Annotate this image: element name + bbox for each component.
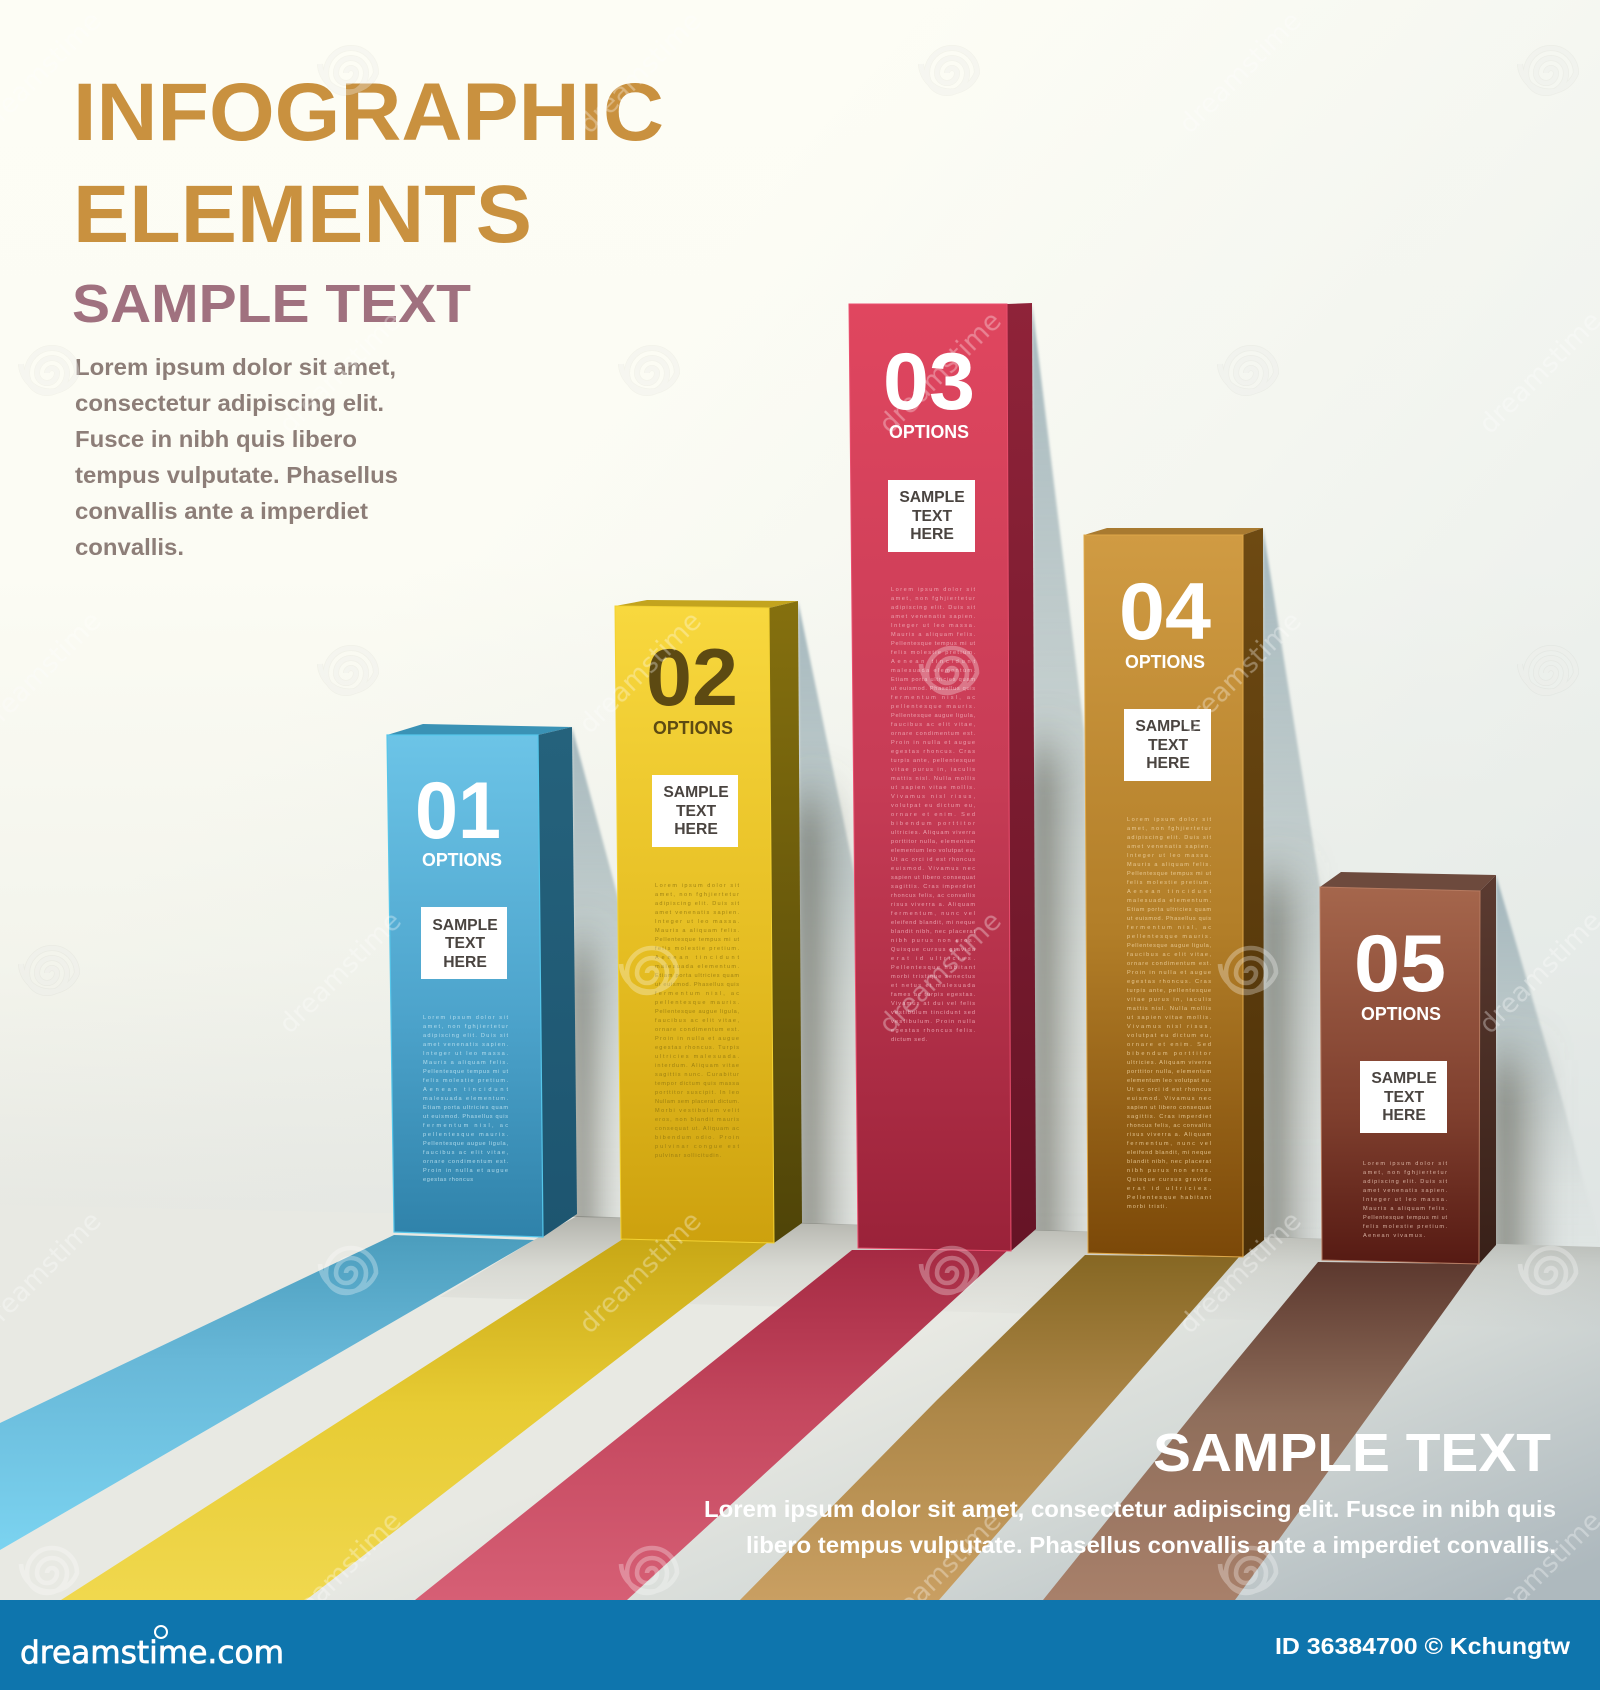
small text 01: malesuada elementum.	[423, 1096, 508, 1102]
small text 02: malesuada elementum.	[655, 964, 739, 970]
small text 03: Etiam porta ultricies quam	[891, 677, 975, 683]
intro paragraph: Fusce in nibh quis libero	[75, 426, 357, 452]
small text 03: volutpat eu dictum eu,	[891, 803, 975, 809]
small text 04: malesuada elementum.	[1127, 898, 1211, 904]
small text 03: Vivamus nisl risus,	[891, 794, 975, 800]
small text 01: faucibus ac elit vitae,	[423, 1150, 508, 1156]
small text 02: ornare condimentum est.	[655, 1027, 739, 1033]
small text 03: eleifend blandit, mi neque	[891, 920, 975, 926]
options label 04: OPTIONS	[1125, 652, 1205, 672]
label box 03: TEXT	[912, 508, 952, 525]
small text 05: Aenean vivamus.	[1363, 1233, 1425, 1239]
intro paragraph: convallis ante a imperdiet	[75, 498, 368, 524]
bottom heading: SAMPLE TEXT	[1153, 1423, 1551, 1483]
small text 04: elementum leo volutpat eu.	[1127, 1078, 1211, 1084]
options label 02: OPTIONS	[653, 718, 733, 738]
small text 02: pulvinar congue est	[655, 1144, 739, 1150]
small text 03: vitae purus in, iaculis	[891, 767, 975, 773]
small text 03: euismod. Vivamus nec	[891, 866, 975, 872]
small text 03: adipiscing elit. Duis sit	[891, 605, 975, 611]
small text 04: bibendum porttitor	[1127, 1051, 1211, 1057]
small text 01: egestas rhoncus	[423, 1177, 473, 1183]
small text 03: egestas rhoncus felis.	[891, 1028, 975, 1034]
small text 02: Aenean tincidunt	[655, 955, 739, 961]
floor stripes	[0, 1235, 1478, 1600]
small text 03: amet, non fghjiertetur	[891, 596, 975, 602]
small text 02: Integer ut leo massa.	[655, 919, 739, 925]
small text 02: porttitor suscipit. In leo	[655, 1090, 739, 1096]
label box 05: SAMPLE	[1371, 1070, 1437, 1087]
small text 04: fermentum nisl, ac	[1127, 925, 1211, 931]
bar 01 right face	[538, 727, 577, 1237]
small text 03: ut euismod. Phasellus quis	[891, 686, 975, 692]
small text 04: Etiam porta ultricies quam	[1127, 907, 1211, 913]
watermark text: dreamstime	[573, 1205, 708, 1340]
options label 01: OPTIONS	[422, 850, 502, 870]
small text 03: faucibus ac elit vitae,	[891, 722, 975, 728]
small text 01: ornare condimentum est.	[423, 1159, 508, 1165]
small text 05: felis molestie pretium.	[1363, 1224, 1447, 1230]
watermark text: dreamstime	[573, 605, 708, 740]
small text 02: fermentum nisl, ac	[655, 991, 739, 997]
label box 02	[652, 775, 738, 847]
small text 03: fermentum, nunc vel	[891, 911, 975, 917]
floor	[0, 1205, 1600, 1600]
stripe: brown	[1043, 1262, 1478, 1600]
small text 01: felis molestie pretium.	[423, 1078, 508, 1084]
small text 03: ultricies. Aliquam viverra	[891, 830, 976, 836]
bar 03 front face	[849, 304, 1011, 1251]
small text 05: amet, non fghjiertetur	[1363, 1170, 1447, 1176]
number 05: 05	[1354, 919, 1446, 1009]
small text 04: Proin in nulla et augue	[1127, 970, 1211, 976]
small text 02: Mauris a aliquam felis.	[655, 928, 739, 934]
small text 02: pellentesque mauris.	[655, 1000, 739, 1006]
watermark text: dreamstime	[873, 905, 1008, 1040]
small text 03: Mauris a aliquam felis.	[891, 632, 975, 638]
small text 03: vestibulum. Proin nulla	[891, 1019, 976, 1025]
small text 02: tempor dictum quis massa	[655, 1081, 740, 1087]
small text 01: adipiscing elit. Duis sit	[423, 1033, 508, 1039]
bar 01 front face	[387, 735, 543, 1237]
small text 04: Aenean tincidunt	[1127, 889, 1211, 895]
small text 02: amet, non fghjiertetur	[655, 892, 739, 898]
small text 04: Pellentesque augue ligula,	[1127, 943, 1211, 949]
bar 05 front face	[1320, 887, 1480, 1264]
number 04: 04	[1119, 567, 1211, 657]
label box 03: SAMPLE	[899, 489, 965, 506]
small text 04: volutpat eu dictum eu,	[1127, 1033, 1211, 1039]
watermark text: dreamstime	[573, 5, 708, 140]
bar 05	[1320, 872, 1496, 1264]
bar 03 right face	[1007, 303, 1036, 1251]
small text 05: Mauris a aliquam felis.	[1363, 1206, 1447, 1212]
small text 04: vitae purus in, iaculis	[1127, 997, 1211, 1003]
small text 05: Integer ut leo massa.	[1363, 1197, 1447, 1203]
small text 04: blandit nibh, nec placerat	[1127, 1159, 1211, 1165]
label box 01: SAMPLE	[432, 917, 498, 934]
small text 04: fermentum, nunc vel	[1127, 1141, 1211, 1147]
small text 01: pellentesque mauris.	[423, 1132, 508, 1138]
footer bar	[0, 1600, 1600, 1690]
small text 02: interdum. Aliquam vitae	[655, 1063, 739, 1069]
small text 03: vestibulum tincidunt sed	[891, 1010, 975, 1016]
small text 03: et netus et malesuada	[891, 983, 976, 989]
small text 03: erat id ultricies.	[891, 956, 975, 962]
small text 04: mattis nisl. Nulla mollis	[1127, 1006, 1211, 1012]
small text 04: nibh purus non eros.	[1127, 1168, 1211, 1174]
small text 04: egestas rhoncus. Cras	[1127, 979, 1211, 985]
small text 03: Proin in nulla et augue	[891, 740, 975, 746]
small text 05: adipiscing elit. Duis sit	[1363, 1179, 1447, 1185]
small text 04: adipiscing elit. Duis sit	[1127, 835, 1211, 841]
small text 04: ultricies. Aliquam viverra	[1127, 1060, 1212, 1066]
small text 03: fermentum nisl, ac	[891, 695, 975, 701]
small text 02: felis molestie pretium.	[655, 946, 739, 952]
label box 03: HERE	[910, 526, 954, 543]
small text 04: Quisque cursus gravida	[1127, 1177, 1212, 1183]
small text 04: ornare condimentum est.	[1127, 961, 1211, 967]
small text 03	[891, 587, 976, 1043]
small text 04: Integer ut leo massa.	[1127, 853, 1211, 859]
small text 04: Ut ac orci id est rhoncus	[1127, 1087, 1211, 1093]
small text 03: ornare et enim. Sed	[891, 812, 975, 818]
small text 03: malesuada elementum.	[891, 668, 975, 674]
label box 02: TEXT	[676, 803, 716, 820]
bar 04	[1084, 528, 1264, 1257]
small text 04: felis molestie pretium.	[1127, 880, 1211, 886]
small text 05: amet venenatis sapien.	[1363, 1188, 1447, 1194]
title	[73, 67, 664, 260]
small text 04: ut euismod. Phasellus quis	[1127, 916, 1211, 922]
stripe: yellow	[61, 1239, 767, 1600]
small text 02: Morbi vestibulum velit	[655, 1108, 739, 1114]
label box 03	[888, 480, 975, 552]
small text 01: Etiam porta ultricies quam	[423, 1105, 508, 1111]
bar 01	[387, 724, 577, 1237]
watermark text: dreamstime	[873, 305, 1008, 440]
watermark text: dreamstime	[1173, 605, 1308, 740]
small text 03: mattis nisl. Nulla mollis	[891, 776, 975, 782]
small text 02	[655, 883, 740, 1159]
small text 04: ornare et enim. Sed	[1127, 1042, 1211, 1048]
small text 04: morbi tristi.	[1127, 1204, 1167, 1210]
small text 01: amet venenatis sapien.	[423, 1042, 508, 1048]
small text 03: Aenean tincidunt	[891, 659, 975, 665]
small text 03: Quisque cursus gravida	[891, 947, 976, 953]
small text 01: amet, non fghjiertetur	[423, 1024, 508, 1030]
bar 02	[615, 600, 802, 1243]
small text 02: adipiscing elit. Duis sit	[655, 901, 739, 907]
label box 02: SAMPLE	[663, 784, 729, 801]
small text 04: eleifend blandit, mi neque	[1127, 1150, 1211, 1156]
small text 03: blandit nibh, nec placerat	[891, 929, 975, 935]
small text 02: Pellentesque augue ligula,	[655, 1009, 739, 1015]
bottom paragraph	[704, 1496, 1556, 1558]
bar 05 right face	[1479, 875, 1496, 1264]
watermark text: dreamstime	[273, 905, 408, 1040]
bar 05 top face	[1320, 872, 1496, 891]
small text 04: Mauris a aliquam felis.	[1127, 862, 1211, 868]
small text 02: faucibus ac elit vitae,	[655, 1018, 739, 1024]
small text 04: pellentesque mauris.	[1127, 934, 1211, 940]
intro paragraph	[75, 354, 398, 560]
small text 02: Etiam porta ultricies quam	[655, 973, 739, 979]
bar 04 top face	[1084, 528, 1263, 535]
watermark text: dreamstime	[1173, 5, 1308, 140]
small text 03: ut sapien vitae mollis.	[891, 785, 975, 791]
small text 01: Integer ut leo massa.	[423, 1051, 508, 1057]
small text 03: amet venenatis sapien.	[891, 614, 975, 620]
label box 02: HERE	[674, 821, 718, 838]
label box 04: HERE	[1146, 755, 1190, 772]
bottom paragraph: Lorem ipsum dolor sit amet, consectetur adipiscing elit. Fusce in nibh quis	[704, 1496, 1556, 1522]
small text 02: ultricies malesuada.	[655, 1054, 739, 1060]
bar 04 front face	[1084, 535, 1243, 1257]
footer credit: ID 36384700 © Kchungtw	[1275, 1633, 1570, 1659]
small text 03: rhoncus felis, ac convallis	[891, 893, 975, 899]
small text 02: Pellentesque tempus mi ut	[655, 937, 739, 943]
intro paragraph: consectetur adipiscing elit.	[75, 390, 384, 416]
small text 04: Pellentesque tempus mi ut	[1127, 871, 1211, 877]
small text 03: morbi tristique senectus	[891, 974, 975, 980]
small text 03: Pellentesque tempus mi ut	[891, 641, 975, 647]
small text 03: pellentesque mauris.	[891, 704, 975, 710]
small text 03: ornare condimentum est.	[891, 731, 975, 737]
label box 01: HERE	[443, 954, 487, 971]
label box 04: TEXT	[1148, 737, 1188, 754]
small text 03: elementum leo volutpat eu.	[891, 848, 975, 854]
small text 04: ut sapien vitae mollis.	[1127, 1015, 1211, 1021]
small text 02: amet venenatis sapien.	[655, 910, 739, 916]
stripe: tan	[740, 1255, 1239, 1600]
small text 03: nibh purus non eros.	[891, 938, 975, 944]
footer logo: dreamstime.com	[20, 1635, 284, 1671]
bar 01 top face	[387, 724, 572, 735]
small text 04: porttitor nulla, elementum	[1127, 1069, 1211, 1075]
intro paragraph: tempus vulputate. Phasellus	[75, 462, 398, 488]
small text 03: Ut ac orci id est rhoncus	[891, 857, 975, 863]
small text 01: Mauris a aliquam felis.	[423, 1060, 508, 1066]
small text 03: turpis ante, pellentesque	[891, 758, 975, 764]
small text 01: Lorem ipsum dolor sit	[423, 1015, 508, 1021]
number 02: 02	[646, 633, 738, 723]
small text 02: Nullam sem placerat dictum.	[655, 1099, 739, 1105]
small text 01: ut euismod. Phasellus quis	[423, 1114, 508, 1120]
small text 03: Integer ut leo massa.	[891, 623, 975, 629]
small text 04	[1127, 817, 1212, 1210]
small text 03: risus viverra a. Aliquam	[891, 902, 975, 908]
label box 05: TEXT	[1384, 1089, 1424, 1106]
small text 04: Vivamus nisl risus,	[1127, 1024, 1211, 1030]
small text 03: dictum sed.	[891, 1037, 927, 1043]
small text 03: Vivamus at dui vel felis	[891, 1001, 975, 1007]
bar 02 right face	[769, 601, 802, 1243]
stripe: blue	[0, 1235, 534, 1550]
intro paragraph: convallis.	[75, 534, 184, 560]
small text 05: Lorem ipsum dolor sit	[1363, 1161, 1447, 1167]
small text 01: Pellentesque augue ligula,	[423, 1141, 508, 1147]
bottom paragraph: libero tempus vulputate. Phasellus convallis ante a imperdiet convallis.	[746, 1532, 1556, 1558]
watermark text: dreamstime	[273, 305, 408, 440]
watermark text: dreamstime	[273, 1505, 408, 1640]
bar 03	[849, 303, 1036, 1251]
small text 01: fermentum nisl, ac	[423, 1123, 508, 1129]
small text 03: egestas rhoncus. Cras	[891, 749, 975, 755]
small text 02: eros, non blandit mauris	[655, 1117, 739, 1123]
label box 04: SAMPLE	[1135, 718, 1201, 735]
small text 04: turpis ante, pellentesque	[1127, 988, 1211, 994]
small text 02: ut euismod. Phasellus quis	[655, 982, 739, 988]
small text 02: Proin in nulla et augue	[655, 1036, 739, 1042]
small text 02: sagittis nunc. Curabitur	[655, 1072, 739, 1078]
options label 05: OPTIONS	[1361, 1004, 1441, 1024]
small text 02: egestas rhoncus. Turpis	[655, 1045, 739, 1051]
small text 04: erat id ultricies.	[1127, 1186, 1211, 1192]
small text 01: Proin in nulla et augue	[423, 1168, 508, 1174]
small text 03: porttitor nulla, elementum	[891, 839, 975, 845]
intro paragraph: Lorem ipsum dolor sit amet,	[75, 354, 396, 380]
label box 05	[1360, 1061, 1447, 1133]
bar 04 right face	[1243, 528, 1264, 1257]
small text 01: Pellentesque tempus mi ut	[423, 1069, 508, 1075]
small text 04: euismod. Vivamus nec	[1127, 1096, 1211, 1102]
subtitle: SAMPLE TEXT	[72, 274, 471, 334]
small text 04: Pellentesque habitant	[1127, 1195, 1211, 1201]
watermark text: dreamstime	[873, 1505, 1008, 1640]
label box 01	[421, 907, 507, 979]
small text 03: Pellentesque habitant	[891, 965, 975, 971]
small text 04: sapien ut libero consequat	[1127, 1105, 1211, 1111]
label box 01: TEXT	[445, 935, 485, 952]
small text 04: sagittis. Cras imperdiet	[1127, 1114, 1211, 1120]
small text 01	[423, 1015, 508, 1183]
watermark text: dreamstime	[1173, 1205, 1308, 1340]
small text 03: Lorem ipsum dolor sit	[891, 587, 975, 593]
small text 01: Aenean tincidunt	[423, 1087, 508, 1093]
small text 02: pulvinar sollicitudin.	[655, 1153, 721, 1159]
small text 03: bibendum porttitor	[891, 821, 975, 827]
label box 04	[1124, 709, 1211, 781]
small text 04: amet venenatis sapien.	[1127, 844, 1211, 850]
bar 02 top face	[615, 600, 798, 608]
small text 05: Pellentesque tempus mi ut	[1363, 1215, 1447, 1221]
bar 02 front face	[615, 606, 774, 1243]
small text 02: Lorem ipsum dolor sit	[655, 883, 739, 889]
small text 03: Pellentesque augue ligula,	[891, 713, 975, 719]
number 03: 03	[883, 337, 975, 427]
bar shadows on wall	[570, 303, 1600, 1300]
small text 03: sagittis. Cras imperdiet	[891, 884, 975, 890]
stripe: red	[415, 1250, 1008, 1600]
small text 04: faucibus ac elit vitae,	[1127, 952, 1211, 958]
small text 04: amet, non fghjiertetur	[1127, 826, 1211, 832]
small text 05	[1363, 1161, 1447, 1239]
small text 03: felis molestie pretium.	[891, 650, 975, 656]
small text 02: bibendum odio. Proin	[655, 1135, 739, 1141]
small text 04: rhoncus felis, ac convallis	[1127, 1123, 1211, 1129]
small text 04: risus viverra a. Aliquam	[1127, 1132, 1211, 1138]
number 01: 01	[415, 766, 501, 856]
small text 03: sapien ut libero consequat	[891, 875, 975, 881]
options label 03: OPTIONS	[889, 422, 969, 442]
title: INFOGRAPHIC	[73, 67, 664, 158]
small text 02: consequat ut. Aliquam ac	[655, 1126, 739, 1132]
small text 04: Lorem ipsum dolor sit	[1127, 817, 1211, 823]
small text 03: fames ac turpis egestas.	[891, 992, 975, 998]
title: ELEMENTS	[73, 169, 532, 260]
label box 05: HERE	[1382, 1107, 1426, 1124]
